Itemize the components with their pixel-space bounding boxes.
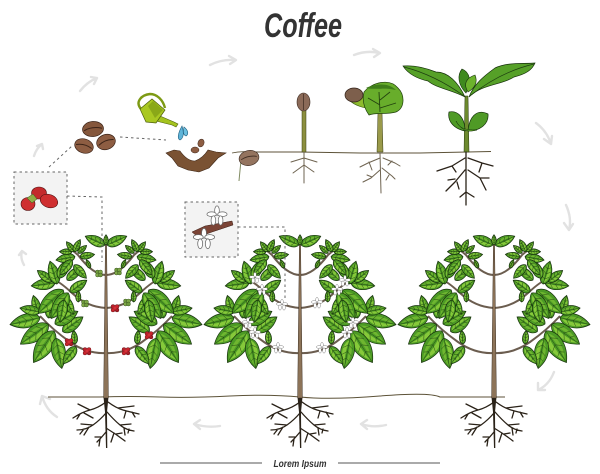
connector: flowers to plant (238, 227, 285, 300)
callout: flowers (185, 202, 238, 257)
upper ground line (232, 152, 491, 153)
plant with berries (8, 232, 204, 448)
seedling with opening leaves (345, 82, 403, 193)
soil with seeds (166, 138, 226, 172)
germinating seed (238, 149, 260, 181)
young plant with true leaves (403, 63, 535, 205)
plant with flowers (202, 232, 398, 448)
cycle arrows (19, 49, 573, 429)
icon: watering can (139, 94, 178, 127)
footer caption: Lorem Ipsum (274, 459, 327, 470)
water drops (178, 126, 188, 140)
beans (73, 121, 117, 156)
plant with bare branches (396, 232, 592, 448)
callout: berries (14, 172, 67, 224)
sprout with seed (291, 93, 317, 183)
connector: beans to soil (120, 137, 166, 140)
connector: berries to plant (67, 196, 102, 262)
lower ground line (48, 394, 505, 398)
connector: berries to beans (49, 146, 72, 167)
title: Coffee (264, 7, 342, 45)
